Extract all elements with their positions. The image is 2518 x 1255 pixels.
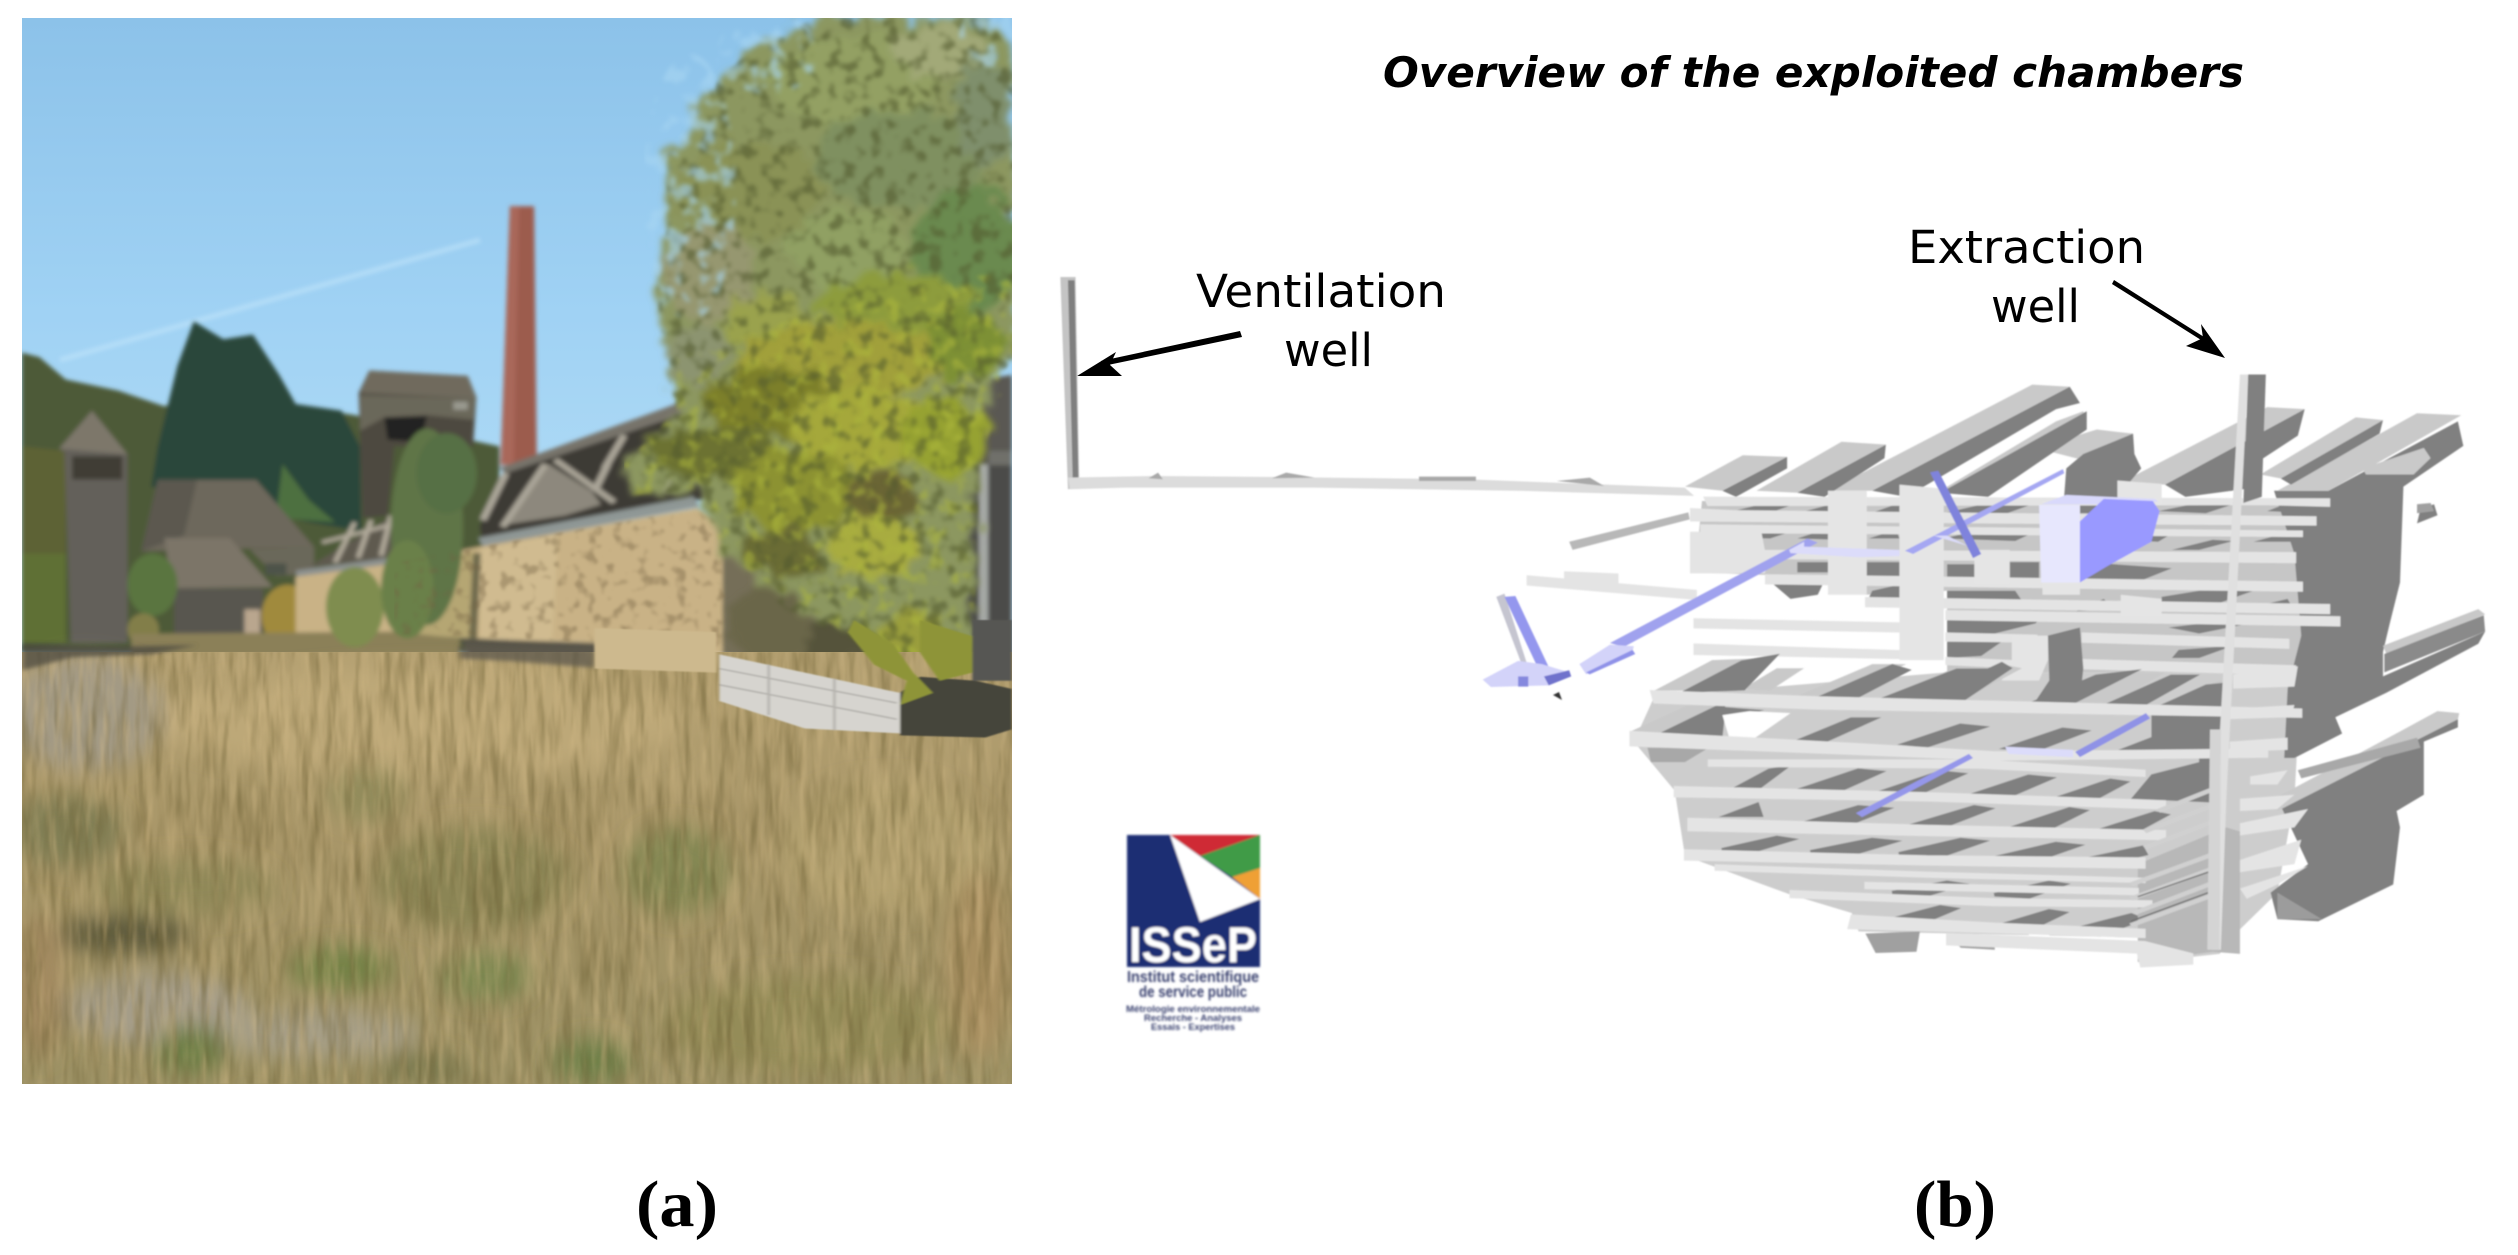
- gabion block: [718, 652, 730, 653]
- heading: Overview of the exploited chambers: [1383, 48, 2244, 97]
- shrubs in front of wall: [326, 567, 384, 647]
- right stacked ends lower block: [2226, 666, 2308, 899]
- ramps at lower right: [2131, 787, 2220, 925]
- wall gutter: [478, 496, 700, 547]
- collapsed roof trusses: [316, 522, 393, 566]
- hillside forest: [22, 353, 499, 652]
- ground foot strip: [131, 632, 460, 656]
- blue galleries: [1483, 469, 2160, 817]
- label: ventilation well: well: [1284, 324, 1373, 377]
- sky: [22, 18, 1012, 678]
- mixed background behind vines: [723, 455, 933, 696]
- left autumn trees: [22, 447, 66, 554]
- contrail: [60, 240, 480, 360]
- label: extraction well: Extraction: [1908, 221, 2145, 274]
- lower block: grey top faces: [1630, 658, 2233, 734]
- soft shadow strips at grass edge: [22, 644, 595, 671]
- recessed dark stubs upper block: [1733, 503, 2322, 658]
- mass below ramp near well: [2131, 683, 2226, 803]
- logo: ISSeP: [1126, 835, 1260, 1033]
- base fill lower block: [1634, 672, 2301, 962]
- label: extraction well: well: [1991, 280, 2080, 333]
- foreground objects at grass edge: [595, 620, 1012, 737]
- logo institute name: Recherche - Analyses: [1144, 1013, 1242, 1024]
- logo mark: [1127, 835, 1260, 967]
- 3D model of exploited chambers: [1060, 277, 2485, 967]
- logo institute name: Essais - Expertises: [1151, 1022, 1235, 1033]
- left ridged stub: [1569, 512, 1690, 550]
- right side bars: [2383, 609, 2485, 654]
- tree foliage: [624, 18, 1018, 696]
- front house: [164, 538, 273, 588]
- tree leaf highlights: [624, 268, 1015, 696]
- columns: [1828, 481, 2162, 680]
- label: ventilation well: Ventilation: [1196, 265, 1446, 318]
- buildings and forest: [22, 206, 1012, 701]
- small bushes: [127, 554, 177, 616]
- arrow: to extraction well: [2112, 280, 2225, 358]
- overgrown grass field: [7, 620, 1012, 1086]
- cream wall: [292, 506, 726, 652]
- white voids: [1722, 711, 1790, 742]
- label: extraction well: [1908, 221, 2145, 333]
- caption: (b): (b): [1914, 1168, 1996, 1241]
- top bars: dark faces: [1722, 387, 2383, 513]
- logo institute name: Métrologie environnementale: [1126, 1004, 1260, 1015]
- hanging vines: [848, 620, 972, 705]
- caption: (a): (a): [636, 1168, 718, 1241]
- gabion wall: [719, 654, 900, 733]
- logo institute name: Institut scientifique: [1127, 969, 1259, 986]
- rear roof: [141, 480, 314, 551]
- sky gaps in tree: [644, 4, 1025, 321]
- wall weathering speckle: [395, 514, 724, 646]
- arrow: to ventilation well: [1077, 331, 1242, 376]
- lower block: dark faces: [1668, 657, 2199, 929]
- dark side mass upper right: [2274, 421, 2485, 758]
- stone tower: [61, 448, 130, 644]
- spruce trees: [151, 321, 361, 531]
- base fill upper block: [1695, 501, 2308, 672]
- panel: site photograph: [7, 4, 1025, 1086]
- logo institute name: [1126, 969, 1260, 1033]
- dark trunk base: [900, 677, 1012, 737]
- chimney: [501, 206, 537, 465]
- lower block: horizontal bands: [1630, 691, 2301, 967]
- coal tower: [359, 371, 476, 518]
- extraction well shaft: [2243, 374, 2266, 503]
- tree leaf shadows: [624, 18, 1015, 696]
- logo acronym: ISSeP: [1129, 917, 1257, 973]
- ventilation well and gallery: [1060, 277, 1694, 496]
- top bars: grey faces: [1685, 385, 2461, 493]
- dark side mass lower right: [2271, 717, 2458, 921]
- central dark mass: [2036, 627, 2083, 701]
- small black artefact: [1553, 692, 1562, 700]
- horizontal bands upper block: [1528, 498, 2339, 674]
- grass blade texture: [22, 652, 1012, 1084]
- logo institute name: de service public: [1139, 984, 1247, 1001]
- long hall roof: [480, 373, 775, 542]
- grass colour patches: [7, 656, 1012, 1086]
- dark brick building right: [962, 456, 1012, 652]
- label: ventilation well: [1196, 265, 1446, 377]
